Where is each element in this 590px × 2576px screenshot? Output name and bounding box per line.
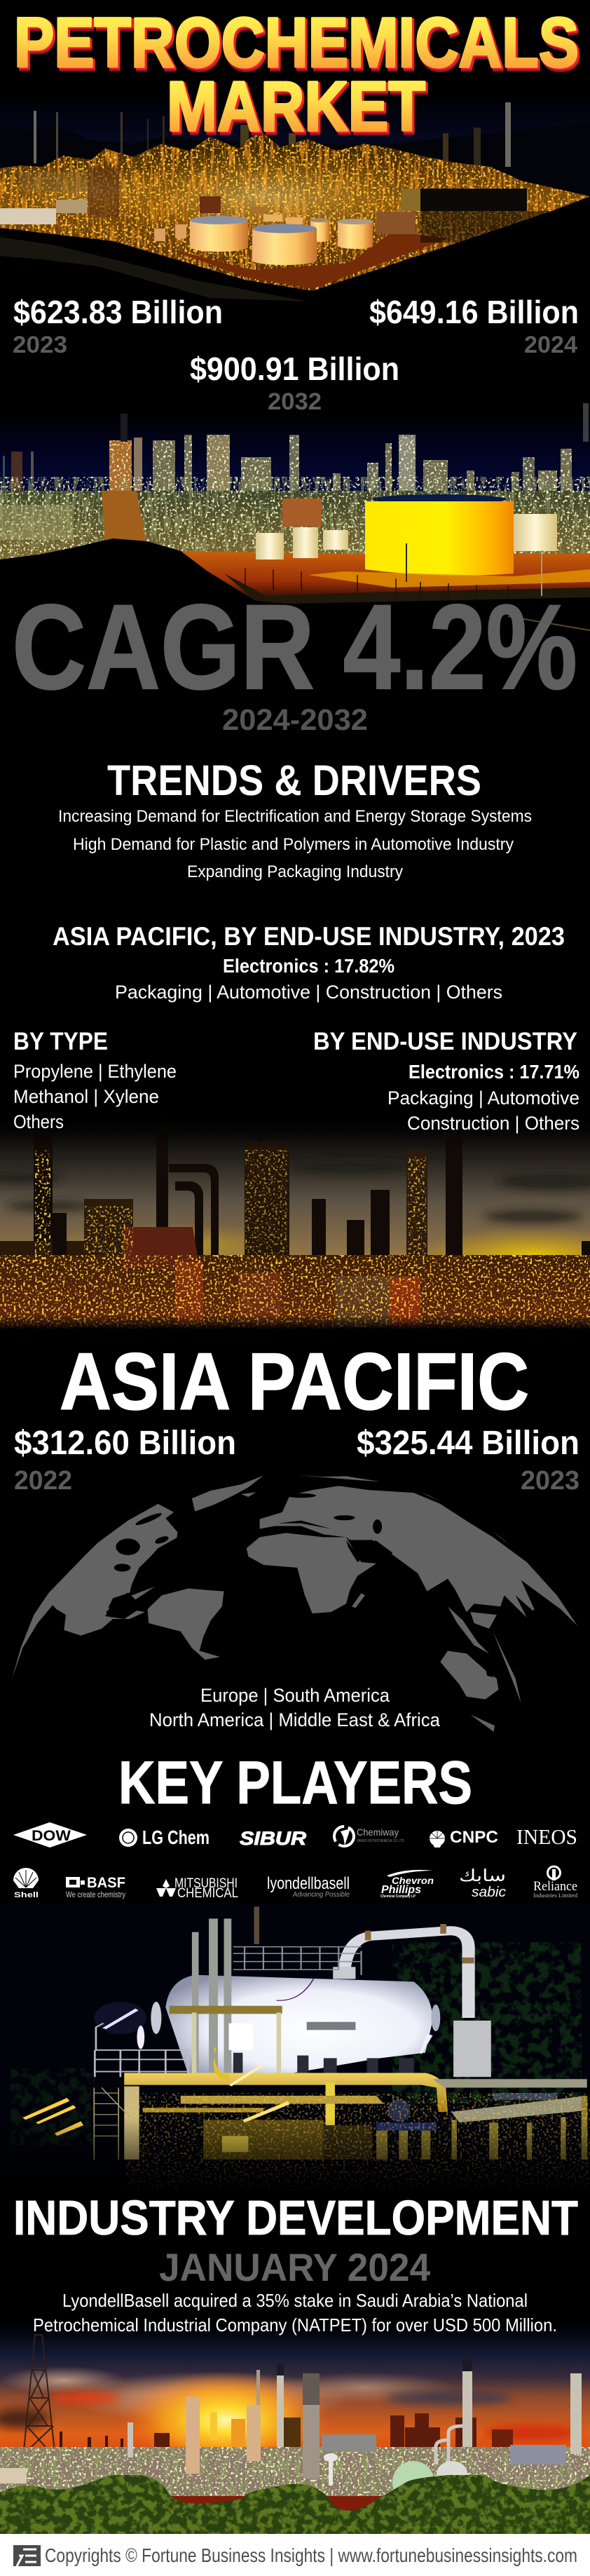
logo: Shell: Shell xyxy=(14,1891,39,1899)
logo: Dow: DOW xyxy=(32,1828,71,1844)
logo: LG Chem: LG Chem xyxy=(142,1826,210,1848)
panel: asia pacific by end-use 2023 xyxy=(53,922,565,1003)
heading: by type: BY TYPE xyxy=(13,1028,108,1055)
logo: Chevron Phillips: Chemical Company LP xyxy=(380,1894,416,1899)
stats: asia pacific 2023 xyxy=(357,1425,579,1496)
LyondellBasell acquisition text: Petrochemical Industrial Company (NATPET) for over USD 500 Million. xyxy=(33,2314,557,2336)
driver 1: Increasing Demand for Electrification and Energy Storage Systems xyxy=(58,807,532,826)
logo: LyondellBasell: Advancing Possible xyxy=(292,1890,350,1899)
heading: by end-use industry: BY END-USE INDUSTRY xyxy=(313,1028,577,1055)
logo: Mitsubishi Chemical: CHEMICAL xyxy=(177,1886,238,1901)
title: MARKET xyxy=(169,71,427,149)
CAGR period: 2024-2032 xyxy=(222,703,368,737)
other segments: Packaging | Automotive | Construction | Others xyxy=(115,982,502,1003)
type list row 2: Methanol | Xylene xyxy=(13,1086,159,1107)
logo: Reliance: Industries Limited xyxy=(533,1892,577,1899)
title xyxy=(14,4,581,149)
logo: Chevron Phillips: Phillips xyxy=(381,1884,421,1896)
stats: market size 2024: $649.16 Billion xyxy=(369,294,579,330)
photo: white pressure vessel with yellow pipes xyxy=(0,1904,590,2198)
stats: market size 2023: $623.83 Billion xyxy=(13,294,223,330)
logo: Ineos: INEOS xyxy=(516,1824,577,1849)
logo: CNPC: CNPC xyxy=(450,1828,498,1847)
logo: Dow xyxy=(13,1822,87,1848)
title: MARKET xyxy=(167,67,425,146)
panel: industry development xyxy=(13,2190,578,2289)
stats: asia pacific 2023: $325.44 Billion xyxy=(357,1425,579,1462)
segment list row 2: Construction | Others xyxy=(407,1113,579,1134)
panel: trends and drivers xyxy=(58,757,532,881)
driver 2: High Demand for Plastic and Polymers in Automotive Industry xyxy=(73,835,514,854)
stats: market size 2032: 2032 xyxy=(268,388,322,415)
logo: Mitsubishi Chemical xyxy=(156,1876,238,1901)
title: MARKET xyxy=(169,69,427,147)
logo: Chemiway xyxy=(334,1826,404,1846)
logo: BASF xyxy=(66,1875,125,1899)
logo: Sabic: sabic xyxy=(472,1885,506,1900)
yellow pipe run xyxy=(124,2073,448,2112)
heading: asia pacific: ASIA PACIFIC xyxy=(60,1337,529,1427)
stats: market size 2032: $900.91 Billion xyxy=(190,351,399,387)
stats: asia pacific 2022: 2022 xyxy=(14,1466,72,1496)
stats: asia pacific 2022: $312.60 Billion xyxy=(14,1425,236,1462)
logo: Sabic: سابك xyxy=(459,1866,506,1885)
region list: Europe | South America xyxy=(200,1685,390,1706)
icon: Fortune Business Insights logo xyxy=(13,2545,41,2566)
footer xyxy=(0,2534,590,2576)
heading: trends and drivers: TRENDS & DRIVERS xyxy=(107,757,481,804)
stats: asia pacific 2022 xyxy=(14,1425,236,1496)
logo: BASF: BASF xyxy=(87,1875,125,1891)
panel: company logos xyxy=(13,1822,577,1901)
stats: market size 2024 xyxy=(369,294,579,358)
region list xyxy=(149,1685,441,1730)
logo: Mitsubishi Chemical: MITSUBISHI xyxy=(174,1876,238,1891)
LyondellBasell acquisition text xyxy=(33,2290,557,2336)
type list row 1: Propylene | Ethylene xyxy=(13,1061,177,1082)
lamps xyxy=(22,2098,69,2120)
logo: CNPC xyxy=(430,1828,498,1848)
panel: by end-use industry xyxy=(313,1028,579,1134)
leading segment: Electronics : 17.82% xyxy=(223,955,395,977)
logo: Reliance xyxy=(533,1866,577,1899)
logo: Chemiway: YANGZI PETROCHEMICAL CO. LTD xyxy=(357,1839,404,1843)
logo: Chevron Phillips xyxy=(380,1870,434,1899)
logo: BASF: We create chemistry xyxy=(66,1890,125,1899)
logo: Sabic xyxy=(459,1866,506,1900)
logo: Sibur: SIBUR xyxy=(240,1828,307,1849)
stats: market size 2023: 2023 xyxy=(13,332,67,358)
logo: LyondellBasell: lyondellbasell xyxy=(267,1874,350,1893)
logo: Shell xyxy=(13,1868,39,1899)
panel: by type xyxy=(13,1028,177,1132)
segment list row 1: Packaging | Automotive xyxy=(387,1087,579,1109)
date: JANUARY 2024 xyxy=(159,2245,430,2289)
logo: LG Chem xyxy=(119,1826,210,1848)
logo: LyondellBasell xyxy=(267,1874,350,1899)
stats: market size 2023 xyxy=(13,294,223,358)
pressure vessel body xyxy=(165,1975,433,2074)
type list row 3: Others xyxy=(13,1111,64,1132)
stats: market size 2032 xyxy=(190,351,399,415)
photo: refinery at night with storage tanks xyxy=(0,91,590,302)
LyondellBasell acquisition text: LyondellBasell acquired a 35% stake in Saudi Arabia’s National xyxy=(62,2290,528,2311)
logo: Chemiway: Chemiway xyxy=(357,1826,399,1838)
region list: North America | Middle East & Africa xyxy=(149,1709,441,1730)
heading: ASIA PACIFIC, BY END-USE INDUSTRY, 2023 xyxy=(53,922,565,951)
photo: refinery towers with yellow tank xyxy=(0,396,590,635)
stats: market size 2024: 2024 xyxy=(524,332,577,358)
world map globe xyxy=(12,1475,577,1732)
stats: asia pacific 2023: 2023 xyxy=(521,1466,579,1496)
logo: Reliance: Reliance xyxy=(533,1879,577,1894)
photo: refinery at dusk xyxy=(0,1115,590,1329)
logo: Chevron Phillips: Chevron xyxy=(392,1875,434,1886)
driver 3: Expanding Packaging Industry xyxy=(187,862,403,881)
photo: refinery at sunset with trees xyxy=(0,2311,590,2534)
heading: key players: KEY PLAYERS xyxy=(118,1749,472,1817)
